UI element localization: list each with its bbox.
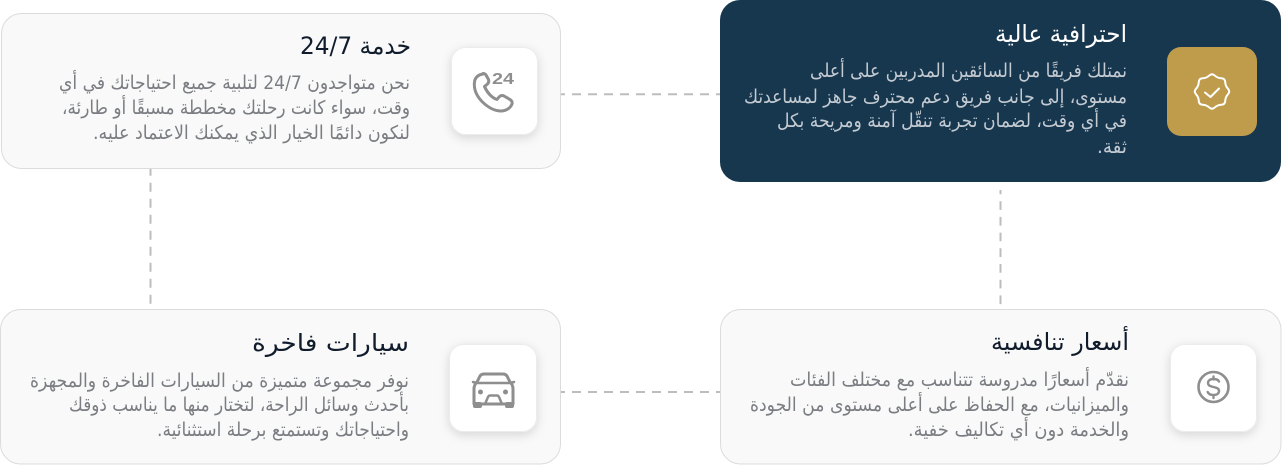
- text block: في أي وقت، لضمان تجربة تنقّل آمنة ومريحة بكل: [777, 108, 1127, 132]
- panel: competitive prices: [720, 310, 1281, 464]
- icon: phone 24: 24: [492, 71, 514, 88]
- panel: high professionalism: [720, 0, 1281, 182]
- icon: dollar coin: [1170, 344, 1256, 432]
- heading: سيارات فاخرة: [252, 329, 409, 357]
- text block: نحن متواجدون 24/7 لتلبية جميع احتياجاتك في أي: [59, 70, 410, 94]
- text block: والميزانيات، مع الحفاظ على أعلى مستوى من الجودة: [750, 392, 1129, 416]
- text block: نوفر مجموعة متميزة من السيارات الفاخرة والمجهزة: [30, 370, 409, 392]
- text block: [750, 367, 1129, 441]
- icon: car: [450, 344, 536, 432]
- text block: [30, 370, 409, 441]
- text block: نقدّم أسعارًا مدروسة تتناسب مع مختلف الفئات: [790, 367, 1129, 391]
- text block: والخدمة دون أي تكاليف خفية.: [908, 417, 1129, 441]
- text block: لنكون دائمًا الخيار الذي يمكنك الاعتماد عليه.: [93, 122, 410, 144]
- panel: luxury cars: [0, 310, 560, 464]
- text block: مستوى، إلى جانب فريق دعم محترف جاهز لمساعدتك: [744, 86, 1127, 109]
- text block: [744, 58, 1127, 158]
- icon: verified badge: [1167, 47, 1257, 136]
- text block: بأحدث وسائل الراحة، لتختار منها ما يناسب ذوقك: [69, 391, 409, 416]
- panel: 24/7 service: [2, 14, 560, 168]
- text block: نمتلك فريقًا من السائقين المدربين على أعلى: [810, 58, 1127, 82]
- heading: أسعار تنافسية: [991, 326, 1129, 356]
- icon: phone 24: [452, 48, 538, 134]
- text block: [59, 70, 410, 144]
- text block: ثقة.: [1097, 136, 1127, 158]
- text block: واحتياجاتك وتستمتع برحلة استثنائية.: [157, 419, 409, 441]
- heading: احترافية عالية: [995, 20, 1127, 48]
- heading: خدمة 24/7: [300, 32, 411, 60]
- text block: وقت، سواء كانت رحلتك مخططة مسبقًا أو طارئة،: [62, 95, 410, 119]
